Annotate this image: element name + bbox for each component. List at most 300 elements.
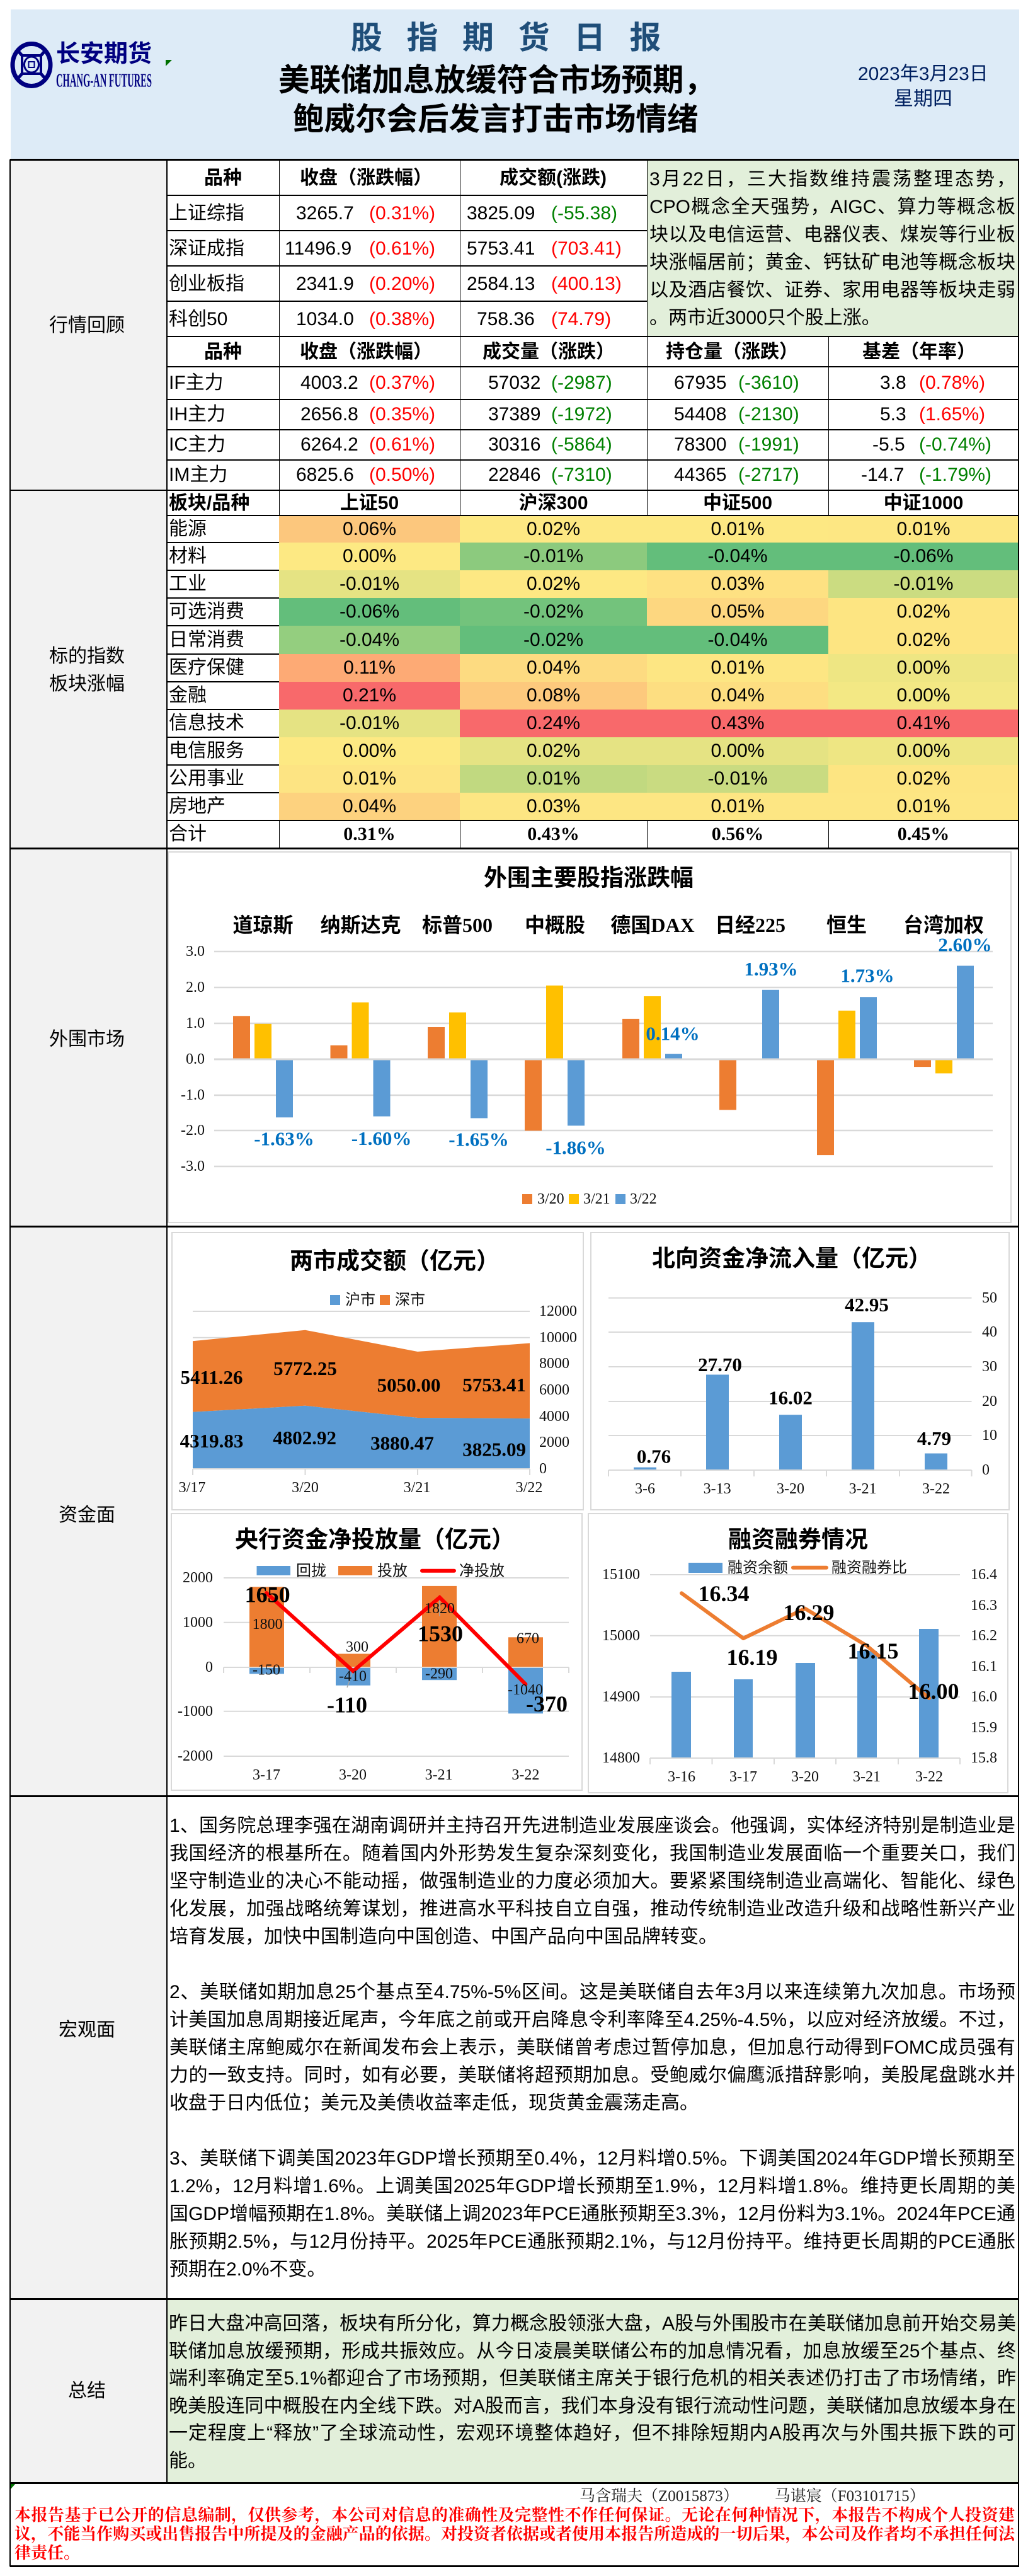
text block: macro news: 1.2%，12月料增1.6%。上调美国2025年GDP增长预期至1.9%，12月料增1.8%。维持更长周期的美 (169, 2176, 1015, 2197)
heatmap table: sector contribution: -0.04% (707, 630, 768, 650)
net injection labels: 1530 (418, 1621, 463, 1647)
heatmap table: sector contribution: 0.21% (343, 685, 396, 706)
text panel: market commentary: CPO概念全天强势，AIGC、算力等概念板 (649, 197, 1015, 217)
category labels: 中概股 (525, 914, 585, 936)
right axis labels (971, 1567, 997, 1766)
heatmap table: sector contribution: 0.03% (711, 573, 765, 594)
category labels: 恒生 (826, 914, 867, 936)
heatmap table: sector contribution: 0.06% (343, 519, 396, 539)
heatmap table: sector contribution: 中证500 (703, 493, 772, 514)
data labels (698, 1581, 959, 1704)
data labels: 16.02 (768, 1386, 813, 1409)
right axis labels: 40 (982, 1324, 997, 1340)
chart: two-market turnover (171, 1232, 584, 1510)
right axis labels: 4000 (539, 1408, 569, 1425)
category labels: 日经225 (715, 914, 785, 936)
left axis labels: 0 (205, 1659, 213, 1676)
table: index close and turnover: (0.38%) (369, 309, 435, 330)
right axis labels: 6000 (539, 1382, 569, 1398)
text block: macro news: 美联储主席鲍威尔在新闻发布会上表示，美联储曾考虑过暂停加息，但加息行动得到FOMC成员强有 (169, 2037, 1015, 2058)
text panel: market commentary: 。两市近3000只个股上涨。 (649, 308, 881, 328)
text panel: market commentary: 块以及电信运营、电器仪表、煤炭等行业板 (649, 224, 1015, 245)
chart: northbound inflow (590, 1232, 1010, 1510)
section label: funding: 资金面 (59, 1505, 115, 1526)
text block: macro news: 坚守制造业的决心不能动摇，做强制造业的力度必须加大。要紧紧围绕制造业高端化、智能化、绿色 (169, 1871, 1015, 1892)
category labels (668, 1769, 943, 1785)
legend (688, 1559, 907, 1577)
y axis labels: 3.0 (186, 943, 205, 960)
table: futures contracts: (-1972) (551, 404, 612, 425)
table: index close and turnover (169, 168, 622, 330)
table: index close and turnover: 11496.9 (285, 238, 351, 259)
legend: 融资余额 (728, 1559, 788, 1577)
table: index close and turnover: (0.61%) (369, 238, 435, 259)
data labels: 16.29 (784, 1600, 834, 1625)
category labels: 3-13 (704, 1481, 731, 1497)
right axis labels: 8000 (539, 1355, 569, 1372)
text block: macro news: 1、国务院总理李强在湖南调研并主持召开先进制造业发展座谈会。他强调，实体经济特别是制造业是 (169, 1815, 1015, 1836)
right axis labels: 15.9 (971, 1720, 997, 1736)
text block: macro news: 国GDP增幅预期在1.8%。美联储上调2023年PCE通胀预期至3.3%，12月份料为3.1%。2024年PCE通 (169, 2204, 1015, 2224)
chart title: 融资融券情况 (728, 1526, 868, 1553)
heatmap table: sector contribution: 上证50 (340, 493, 399, 514)
table: index close and turnover: 3825.09 (467, 203, 535, 224)
heatmap table: sector contribution: 0.24% (527, 713, 580, 733)
legend: 3/20 (537, 1191, 564, 1207)
heatmap table: sector contribution: 0.03% (527, 796, 580, 817)
table: futures contracts: 4003.2 (300, 372, 358, 393)
heatmap table: sector contribution: 0.08% (527, 685, 580, 706)
legend (522, 1191, 657, 1207)
disclaimer: 议，不能当作购买或出售报告中所提及的金融产品的依据。对投资者依据或者使用本报告所造成的一切后果，本公司及作者均不承担任何法 (14, 2525, 1015, 2543)
data labels: 5411.26 (180, 1366, 243, 1388)
ratio line (682, 1593, 929, 1698)
withdrawal bars (249, 1667, 543, 1713)
text panel: summary (167, 2299, 1019, 2483)
table: index close and turnover: 758.36 (477, 309, 535, 330)
table: futures contracts: (-2130) (738, 404, 799, 425)
text block: macro news: 力的一致支持。同时，如有必要，美联储将超预期加息。受鲍威尔偏鹰派措辞影响，美股尾盘跳水并 (169, 2065, 1015, 2086)
table: futures contracts: IF主力 (169, 372, 224, 393)
right axis labels: 20 (982, 1393, 997, 1410)
data labels (637, 1294, 951, 1467)
heatmap table: sector contribution: 0.01% (711, 796, 765, 817)
heatmap table: sector contribution (169, 493, 1018, 844)
left axis labels: 14900 (602, 1689, 640, 1705)
data labels 3/22: -1.60% (351, 1127, 411, 1149)
disclaimer: 律责任。 (14, 2544, 80, 2562)
heatmap table: sector contribution: 工业 (169, 573, 207, 594)
table: index close and turnover: (0.20%) (369, 273, 435, 294)
right axis labels: 16.0 (971, 1689, 997, 1705)
legend: 3/21 (583, 1191, 610, 1207)
table: index close and turnover: 成交额(涨跌) (500, 168, 607, 188)
y axis labels: 1.0 (186, 1015, 205, 1032)
data labels 3/22: 1.93% (744, 958, 798, 980)
table: futures contracts: (-1.79%) (919, 464, 991, 485)
heatmap table: sector contribution: -0.01% (707, 768, 768, 789)
table: futures contracts: 成交量（涨跌） (483, 342, 615, 362)
y axis labels: 2.0 (186, 979, 205, 996)
right axis labels: 12000 (539, 1303, 577, 1320)
bars 3/20 (233, 1016, 931, 1155)
headline line 2: 鲍威尔会后发言打击市场情绪 (293, 102, 698, 137)
data labels 3/22: 0.14% (646, 1022, 700, 1045)
heatmap table: sector contribution: 公用事业 (169, 768, 244, 789)
heatmap table: sector contribution: 0.02% (896, 768, 951, 789)
text block: macro news (169, 1815, 1015, 2280)
category labels: 1800 (253, 1616, 283, 1633)
chart: overseas index changes (168, 851, 1012, 1223)
category labels: 台湾加权 (903, 914, 984, 936)
left axis labels: 2000 (183, 1570, 213, 1586)
heatmap table: sector contribution: 0.00% (896, 657, 951, 678)
right axis labels: 15.8 (971, 1750, 997, 1766)
table: index close and turnover: 2341.9 (296, 273, 354, 294)
legend: 沪市 (345, 1292, 375, 1308)
heatmap table: sector contribution: -0.01% (523, 546, 583, 566)
category labels: 3-17 (253, 1767, 280, 1783)
chart: central bank net injection (171, 1513, 583, 1791)
data labels 3/22: -1.65% (448, 1128, 509, 1151)
category labels: 1820 (425, 1601, 455, 1617)
table: index close and turnover: (-55.38) (551, 203, 617, 224)
table: futures contracts: 6825.6 (296, 464, 354, 485)
category labels (253, 1601, 543, 1783)
heatmap table: sector contribution: 日常消费 (169, 630, 244, 650)
category labels (179, 1480, 542, 1496)
section label: index sector moves (49, 646, 125, 694)
heatmap table: sector contribution: 0.05% (711, 601, 765, 622)
table: futures contracts: -5.5 (872, 434, 905, 455)
heatmap table: sector contribution: -0.06% (340, 601, 399, 622)
data labels: 16.00 (908, 1679, 959, 1704)
report date: 2023年3月23日 (858, 64, 988, 84)
category labels: 3-16 (668, 1769, 695, 1785)
text block: macro news: 化发展，加强战略统筹谋划，推进高水平科技自立自强，推动传统制造业改造升级和战略性新兴产业 (169, 1899, 1015, 1919)
heatmap table: sector contribution: -0.04% (707, 546, 768, 566)
section label: index sector moves: 标的指数 (49, 646, 125, 667)
net injection labels (245, 1582, 568, 1718)
heatmap table: sector contribution: -0.01% (340, 573, 399, 594)
left axis labels (178, 1570, 213, 1764)
category labels: 3/21 (404, 1480, 430, 1496)
net injection labels: -110 (327, 1693, 367, 1718)
data labels: 5050.00 (377, 1374, 440, 1396)
legend: 净投放 (459, 1563, 505, 1579)
heatmap table: sector contribution: 0.04% (343, 796, 396, 817)
right axis labels: 16.4 (971, 1567, 997, 1583)
section label: index sector moves: 板块涨幅 (49, 674, 125, 694)
table: futures contracts: 2656.8 (300, 404, 358, 425)
left axis labels: 15000 (602, 1628, 640, 1644)
category labels: -1040 (508, 1682, 543, 1698)
analyst signatures: 马含瑞夫（Z0015873） 马谌宸（F03101715） (580, 2488, 925, 2505)
y axis labels: -3.0 (181, 1158, 205, 1175)
right axis labels: 10 (982, 1427, 997, 1444)
table: index close and turnover: 科创50 (169, 309, 227, 330)
text block: macro news: 培育发展，加快中国制造向中国创造、中国产品向中国品牌转变。 (169, 1926, 717, 1947)
text panel: market commentary: 以及酒店餐饮、证券、家用电器等板块走弱 (649, 280, 1015, 301)
left axis labels: 1000 (183, 1614, 213, 1631)
table: futures contracts: 30316 (488, 434, 540, 455)
table: index close and turnover: 3265.7 (296, 203, 354, 224)
heatmap table: sector contribution: 0.00% (711, 740, 765, 761)
bars 3/22 (276, 966, 974, 1125)
table: futures contracts: (0.61%) (369, 434, 435, 455)
disclaimer (14, 2506, 1015, 2562)
data labels: 16.19 (727, 1645, 777, 1670)
right axis labels: 16.1 (971, 1659, 997, 1675)
heatmap table: sector contribution: 能源 (169, 519, 207, 539)
category labels: -290 (425, 1666, 453, 1682)
legend: 深市 (395, 1292, 425, 1308)
heatmap table: sector contribution: 合计 (169, 824, 207, 844)
heatmap table: sector contribution: 0.00% (896, 685, 951, 706)
table: futures contracts: (-5864) (551, 434, 612, 455)
category labels: 3-20 (339, 1767, 367, 1783)
heatmap table: sector contribution: 材料 (169, 546, 207, 566)
header banner (11, 9, 1019, 159)
table: futures contracts: (-0.74%) (919, 434, 991, 455)
data labels: 27.70 (698, 1354, 742, 1376)
heatmap table: sector contribution: 0.02% (896, 601, 951, 622)
table: index close and turnover: 上证综指 (169, 203, 244, 224)
heatmap table: sector contribution: 0.01% (896, 796, 951, 817)
category labels: 3-20 (791, 1769, 819, 1785)
heatmap table: sector contribution: -0.02% (523, 630, 583, 650)
table: index close and turnover: 5753.41 (467, 238, 535, 259)
legend (330, 1292, 425, 1308)
table: index close and turnover: (74.79) (551, 309, 611, 330)
table: index close and turnover: 收盘（涨跌幅） (300, 168, 432, 188)
logo: Chang-An Futures: 长安期货 (56, 41, 152, 67)
heatmap table: sector contribution: 中证1000 (884, 493, 963, 514)
report title: 股指期货日报 (351, 20, 685, 55)
right axis labels: 16.3 (971, 1597, 997, 1614)
table: futures contracts: IM主力 (169, 464, 227, 485)
net injection labels: 1650 (245, 1582, 290, 1607)
category labels: 3-21 (853, 1769, 881, 1785)
text panel: market commentary: 3月22日，三大指数维持震荡整理态势， (649, 169, 1015, 190)
table: futures contracts: (-2717) (738, 464, 799, 485)
heatmap table: sector contribution: 房地产 (169, 796, 226, 817)
data labels 3/22: -1.86% (545, 1137, 606, 1158)
data labels 3/22: -1.63% (254, 1128, 314, 1149)
table: futures contracts: 3.8 (880, 372, 906, 393)
heatmap table: sector contribution: 板块/品种 (169, 493, 249, 514)
text block: macro news: 预期在2.0%不变。 (169, 2259, 326, 2280)
category labels: -410 (339, 1669, 367, 1685)
category labels (635, 1481, 950, 1497)
category labels: 3-22 (511, 1767, 539, 1783)
category labels: 纳斯达克 (321, 914, 401, 936)
y axis labels (181, 943, 205, 1175)
corner marker (11, 2484, 15, 2489)
category labels: 3-6 (635, 1481, 655, 1497)
legend: 3/22 (630, 1191, 657, 1207)
table: index close and turnover: (400.13) (551, 273, 622, 294)
left axis labels: -1000 (178, 1703, 213, 1720)
text panel: summary: 端利率确定至5.1%都迎合了市场预期，但美联储主席关于银行危机的相关表述仍打击了市场情绪，昨 (169, 2368, 1016, 2389)
data labels: 5772.25 (273, 1357, 337, 1379)
table: futures contracts: -14.7 (861, 464, 904, 485)
right axis labels (539, 1303, 577, 1477)
chart title: 北向资金净流入量（亿元） (652, 1245, 932, 1272)
balance bars (671, 1629, 939, 1758)
text block: macro news: 收盘于日内低位；美元及美债收益率走低，现货黄金震荡走高。 (169, 2093, 699, 2113)
table: futures contracts: 57032 (488, 372, 540, 393)
legend (257, 1563, 505, 1579)
heatmap table: sector contribution: 0.02% (896, 630, 951, 650)
heatmap table: sector contribution: 0.45% (898, 824, 949, 844)
table: index close and turnover: (703.41) (551, 238, 622, 259)
table: futures contracts: 22846 (488, 464, 540, 485)
heatmap table: sector contribution: 0.01% (527, 768, 580, 789)
heatmap table: sector contribution: 0.02% (527, 573, 580, 594)
legend: 投放 (377, 1563, 408, 1579)
category labels: 3-20 (777, 1481, 804, 1497)
net injection line (266, 1593, 525, 1684)
data labels: 42.95 (845, 1294, 889, 1316)
table: futures contracts: 品种 (204, 342, 242, 362)
text block: macro news: 计美国加息周期接近尾声，今年底之前或开启降息令利率降至4.25%-4.5%，以应对经济放缓。不过， (169, 2010, 1015, 2030)
heatmap table: sector contribution: 0.41% (896, 713, 951, 733)
heatmap table: sector contribution: 0.00% (343, 546, 396, 566)
right axis labels: 10000 (539, 1330, 577, 1346)
stacked area: Shanghai (193, 1406, 530, 1469)
chart: margin financing (588, 1513, 1008, 1793)
table: futures contracts (169, 342, 991, 485)
data labels (180, 1357, 526, 1461)
heatmap table: sector contribution: 可选消费 (169, 601, 244, 622)
section label: summary: 总结 (68, 2381, 106, 2401)
y axis labels: 0.0 (186, 1051, 205, 1067)
table: futures contracts: (0.35%) (369, 404, 435, 425)
text panel: summary: 联储加息放缓预期，形成共振效应。从今日凌晨美联储公布的加息情况看，加息放缓至25个基点、终 (169, 2341, 1016, 2362)
heatmap table: sector contribution: 0.43% (527, 824, 580, 844)
data labels 3/22: 2.60% (938, 934, 992, 955)
heatmap table: sector contribution: 0.04% (711, 685, 765, 706)
y axis labels: -1.0 (181, 1087, 205, 1103)
table: futures contracts: (1.65%) (919, 404, 985, 425)
table: futures contracts: (0.78%) (919, 372, 985, 393)
table: index close and turnover: 2584.13 (467, 273, 535, 294)
heatmap table: sector contribution: 沪深300 (518, 493, 588, 514)
y axis labels: -2.0 (181, 1122, 205, 1139)
headline line 1: 美联储加息放缓符合市场预期， (278, 63, 715, 98)
disclaimer: 本报告基于已公开的信息编制，仅供参考，本公司对信息的准确性及完整性不作任何保证。无论在何种情况下，本报告不构成个人投资建 (14, 2506, 1015, 2524)
chart title: 两市成交额（亿元） (290, 1248, 500, 1274)
table: futures contracts: 67935 (674, 372, 726, 393)
right axis labels: 0 (982, 1462, 990, 1478)
legend: 回拢 (296, 1563, 326, 1579)
right axis labels: 16.2 (971, 1628, 997, 1644)
heatmap table: sector contribution: 0.04% (527, 657, 580, 678)
data labels 3/22 (254, 934, 992, 1158)
data labels: 4319.83 (180, 1430, 243, 1452)
section label: market review: 行情回顾 (49, 315, 125, 336)
bars (634, 1322, 947, 1470)
net injection labels: -370 (526, 1691, 568, 1716)
heatmap table: sector contribution: 0.00% (896, 740, 951, 761)
table: futures contracts: IH主力 (169, 404, 226, 425)
heatmap table: sector contribution: 0.56% (712, 824, 763, 844)
heatmap table: sector contribution: 0.01% (711, 657, 765, 678)
table: futures contracts: 44365 (674, 464, 726, 485)
heatmap table: sector contribution: -0.01% (340, 713, 399, 733)
heatmap table: sector contribution: 医疗保健 (169, 657, 244, 678)
right axis labels: 2000 (539, 1434, 569, 1451)
chart title: 央行资金净投放量（亿元） (235, 1526, 515, 1553)
heatmap table: sector contribution: 0.43% (711, 713, 765, 733)
table: futures contracts: 基差（年率） (862, 342, 976, 362)
right axis labels: 50 (982, 1290, 997, 1306)
data labels: 16.34 (698, 1581, 750, 1606)
category labels: 3/22 (516, 1480, 542, 1496)
category labels: 3-17 (729, 1769, 757, 1785)
table: futures contracts: (0.37%) (369, 372, 435, 393)
data labels: 4802.92 (273, 1427, 336, 1449)
heatmap table: sector contribution: 0.02% (527, 740, 580, 761)
category labels: -150 (253, 1662, 280, 1679)
heatmap table: sector contribution: 金融 (169, 685, 207, 706)
category labels: 3-21 (849, 1481, 877, 1497)
table: futures contracts: 54408 (674, 404, 726, 425)
legend: 融资融券比 (831, 1559, 907, 1577)
table: index close and turnover: 创业板指 (169, 273, 244, 294)
injection bars (249, 1586, 543, 1667)
category labels: 3-21 (425, 1767, 453, 1783)
table: futures contracts: 37389 (488, 404, 540, 425)
right axis labels (982, 1290, 997, 1478)
data labels: 3825.09 (462, 1438, 526, 1461)
chart title: 外围主要股指涨跌幅 (484, 865, 694, 891)
table: futures contracts: 6264.2 (300, 434, 358, 455)
heatmap table: sector contribution: 0.01% (343, 768, 396, 789)
category labels: 670 (517, 1631, 539, 1647)
text panel: market commentary: 块涨幅居前；黄金、钙钛矿电池等概念板块 (649, 252, 1015, 273)
category labels: 道琼斯 (232, 914, 294, 936)
heatmap table: sector contribution: -0.06% (893, 546, 954, 566)
heatmap table: sector contribution: 0.00% (343, 740, 396, 761)
data labels: 0.76 (637, 1446, 671, 1467)
category labels: 3-22 (922, 1481, 950, 1497)
table: futures contracts: (-7310) (551, 464, 612, 485)
right axis labels: 30 (982, 1359, 997, 1375)
report weekday: 星期四 (894, 88, 952, 110)
category labels: 300 (346, 1639, 368, 1655)
data labels: 4.79 (917, 1427, 951, 1449)
stacked area: Shenzhen (193, 1330, 530, 1418)
category labels: 3-22 (915, 1769, 943, 1785)
heatmap table: sector contribution: 电信服务 (169, 740, 244, 761)
category labels: 标普500 (422, 914, 493, 936)
category labels: 3/17 (179, 1480, 205, 1496)
section label: macro view: 宏观面 (59, 2020, 115, 2040)
heatmap table: sector contribution: 0.02% (527, 519, 580, 539)
table: futures contracts: (-1991) (738, 434, 799, 455)
text panel: summary: 能。 (169, 2451, 207, 2471)
heatmap table: sector contribution: 信息技术 (169, 713, 244, 733)
table: futures contracts: (0.50%) (369, 464, 435, 485)
table: futures contracts: 持仓量（涨跌） (666, 342, 798, 362)
text block: macro news: 胀预期2.5%，与12月份持平。2025年PCE通胀预期2.1%，与12月份持平。维持更长周期的PCE通胀 (169, 2231, 1015, 2252)
table: futures contracts: (-2987) (551, 372, 612, 393)
heatmap table: sector contribution: 0.01% (896, 519, 951, 539)
data labels: 5753.41 (462, 1374, 526, 1396)
table: futures contracts: IC主力 (169, 434, 226, 455)
